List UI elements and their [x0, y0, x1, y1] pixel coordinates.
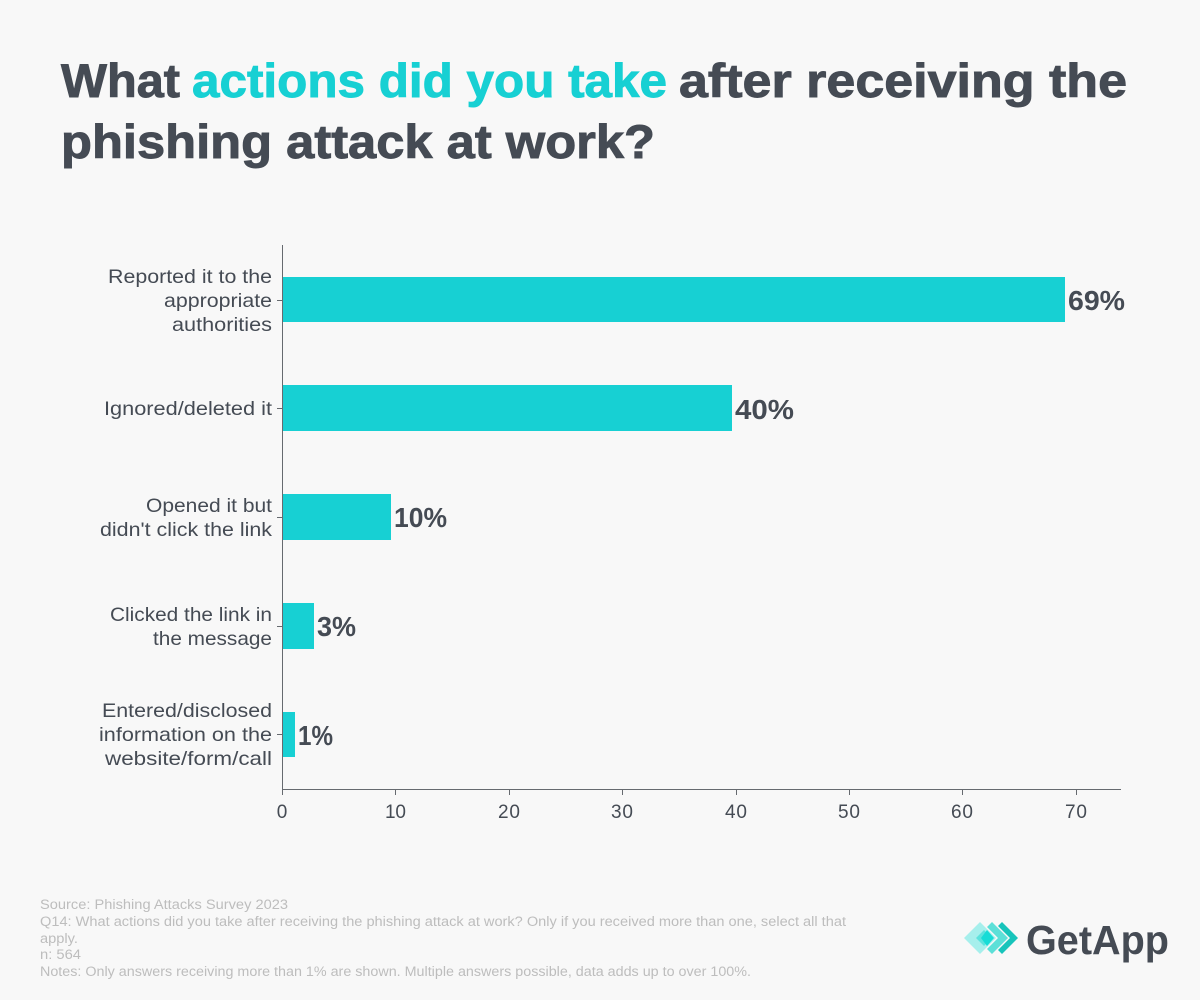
- category labels: appropriate: [164, 290, 272, 312]
- category labels: Entered/disclosed: [102, 700, 272, 722]
- source notes: Q14: What actions did you take after receiving the phishing attack at work? Only if you received more than one, select all that: [40, 914, 846, 929]
- x axis tick labels: 10: [385, 802, 406, 823]
- category labels: Opened it but: [146, 495, 273, 517]
- bars: [282, 277, 1065, 757]
- value labels: 40%: [735, 394, 794, 425]
- value labels: 69%: [1068, 285, 1125, 316]
- logo wordmark: GetApp: [1026, 917, 1169, 963]
- category labels: website/form/call: [104, 748, 272, 770]
- category labels: [99, 266, 273, 770]
- x axis tick labels: 60: [951, 802, 973, 823]
- category labels: Ignored/deleted it: [104, 398, 273, 420]
- title: after receiving the: [679, 54, 1127, 107]
- x axis tick labels: 0: [277, 802, 287, 823]
- source notes: apply.: [40, 931, 78, 946]
- x axis tick labels: 40: [725, 802, 747, 823]
- icon: diamonds: [964, 922, 1018, 954]
- source notes: n: 564: [40, 947, 82, 962]
- category labels: information on the: [99, 724, 272, 746]
- x axis tick labels: 70: [1065, 802, 1087, 823]
- title: [61, 54, 1127, 168]
- title: phishing attack at work?: [61, 115, 655, 168]
- category labels: authorities: [172, 314, 272, 336]
- x axis tick labels: 20: [498, 802, 520, 823]
- value labels: 10%: [394, 502, 447, 533]
- logo: GetApp: [964, 917, 1169, 963]
- x axis tick labels: 30: [611, 802, 633, 823]
- category labels: didn't click the link: [100, 519, 272, 541]
- value labels: 3%: [317, 611, 356, 642]
- category labels: Reported it to the: [108, 266, 272, 288]
- category labels: Clicked the link in: [110, 604, 272, 626]
- axes: [277, 245, 1121, 795]
- value labels: [298, 285, 1125, 751]
- source notes: Notes: Only answers receiving more than 1% are shown. Multiple answers possible, data adds up to over 100%.: [40, 964, 751, 979]
- title: actions did you take: [192, 54, 667, 107]
- category labels: the message: [153, 628, 272, 650]
- source notes: [40, 897, 846, 979]
- x axis tick labels: [277, 802, 1087, 823]
- value labels: 1%: [298, 720, 333, 751]
- source notes: Source: Phishing Attacks Survey 2023: [40, 897, 288, 912]
- x axis tick labels: 50: [838, 802, 860, 823]
- bar chart: [99, 245, 1125, 823]
- title: What: [61, 54, 180, 107]
